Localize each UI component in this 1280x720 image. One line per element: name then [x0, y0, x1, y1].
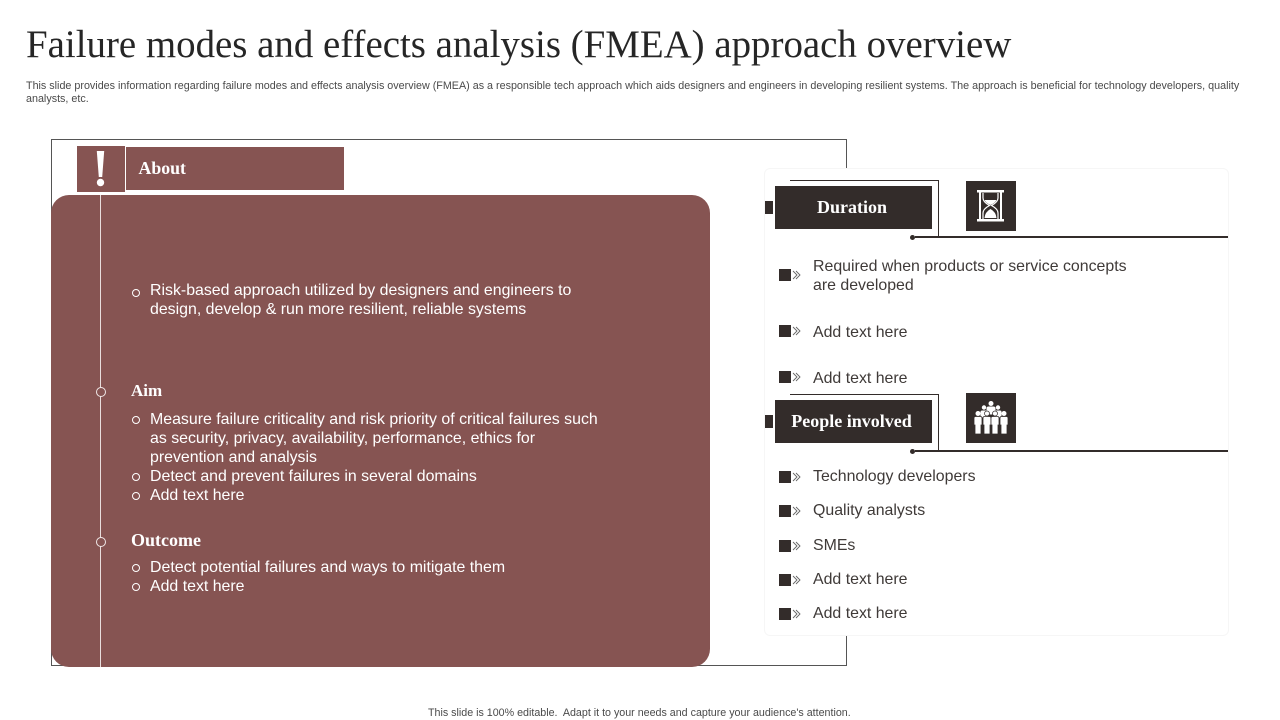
duration header: Duration: [817, 197, 887, 217]
aim text block: as security, privacy, availability, performance, ethics for: [150, 430, 535, 446]
icon: group of people: [966, 393, 1016, 443]
aim text block: Add text here: [150, 486, 245, 504]
timeline line: [100, 195, 101, 667]
panel: about main card: [51, 195, 710, 667]
outcome text block: Detect potential failures and ways to mitigate them: [150, 558, 505, 576]
people list: [779, 468, 976, 622]
people list: SMEs: [813, 537, 855, 554]
subtitle description: This slide provides information regarding failure modes and effects analysis overview (FMEA) as a responsible tech approach which aids designers and engineers in developing resilient systems. The approach is beneficial for technology developers, quality analysts, etc.: [26, 80, 1239, 104]
people involved header: People involved: [791, 411, 912, 431]
people list: Quality analysts: [813, 502, 925, 519]
panel: right card: [764, 168, 1229, 636]
timeline marker: aim: [96, 387, 106, 397]
people involved header: [765, 394, 1228, 454]
duration list: Add text here: [813, 370, 908, 386]
about text block: design, develop & run more resilient, reliable systems: [150, 301, 526, 318]
icon: hourglass: [966, 181, 1016, 231]
about heading bar: About: [138, 158, 186, 178]
duration list: Add text here: [813, 324, 908, 340]
people list: Technology developers: [813, 468, 976, 485]
aim text block: Detect and prevent failures in several domains: [150, 468, 477, 484]
outcome text block: Add text here: [150, 578, 245, 594]
aim heading: Aim: [131, 381, 162, 400]
icon: exclamation mark: [77, 146, 125, 192]
aim text block: Measure failure criticality and risk priority of critical failures such: [150, 410, 598, 428]
duration list: [779, 258, 1127, 386]
timeline marker: outcome: [96, 537, 106, 547]
people list: Add text here: [813, 571, 908, 588]
duration list: are developed: [813, 277, 914, 294]
outcome text block: [132, 558, 505, 594]
about heading bar: [126, 147, 344, 190]
duration header: [765, 180, 1228, 240]
about text block: [132, 282, 571, 318]
footer note: This slide is 100% editable. Adapt it to your needs and capture your audience's attention.: [428, 707, 851, 719]
outcome heading: Outcome: [131, 530, 201, 550]
duration list: Required when products or service concepts: [813, 258, 1127, 275]
panel: about outline frame: [51, 139, 847, 666]
title: Failure modes and effects analysis (FMEA) approach overview: [26, 23, 1011, 66]
aim text block: [132, 410, 598, 504]
aim text block: prevention and analysis: [150, 448, 317, 466]
people list: Add text here: [813, 605, 908, 622]
about text block: Risk-based approach utilized by designers and engineers to: [150, 282, 571, 299]
